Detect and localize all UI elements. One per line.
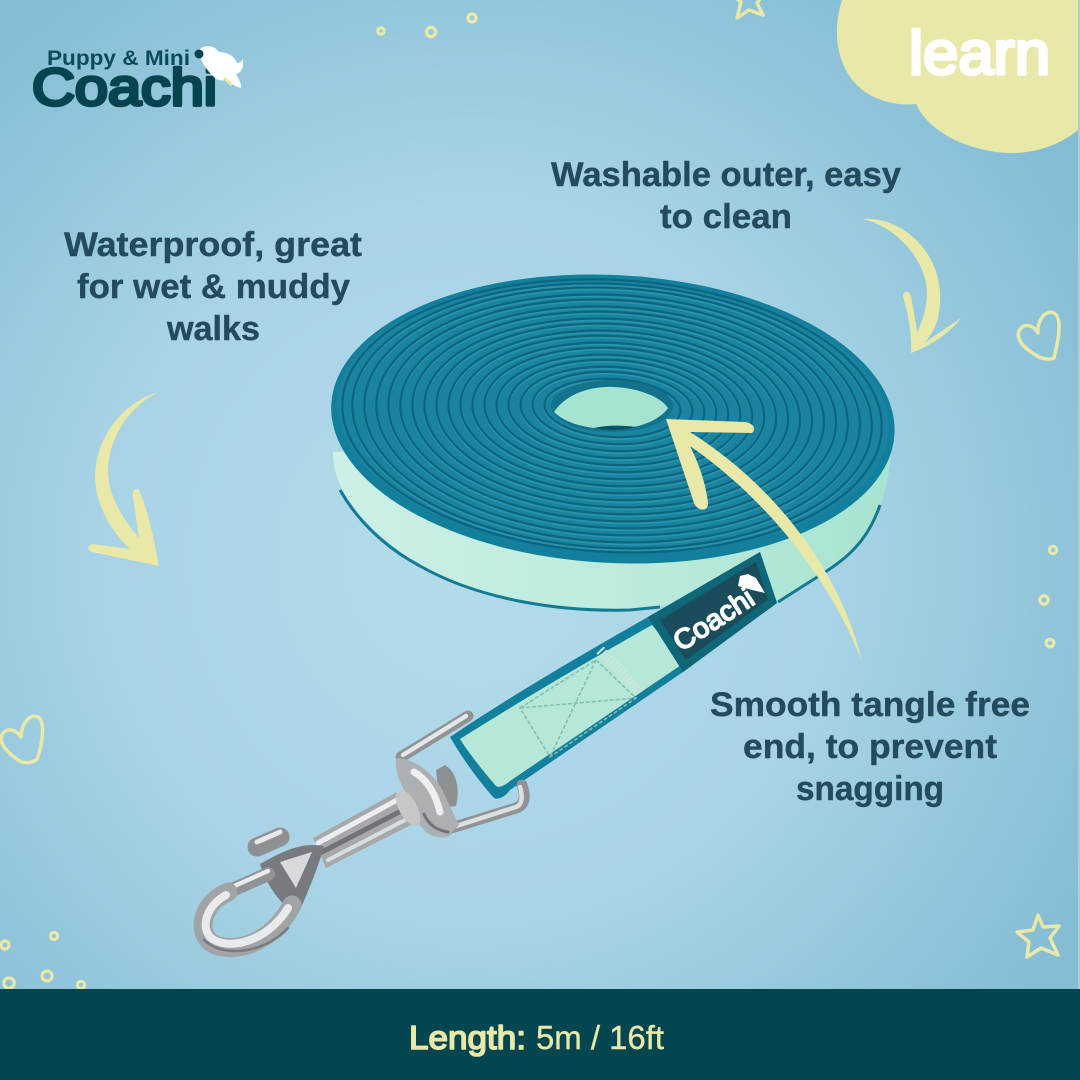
hook body	[260, 845, 324, 914]
swivel	[396, 758, 459, 837]
decoration: left heart	[1, 716, 43, 763]
heading: washable: Washable outer, easy	[551, 156, 901, 194]
heading: tangle free: Smooth tangle free	[710, 686, 1030, 724]
logo tagline: Puppy & Mini	[47, 47, 190, 70]
brand tag dog	[738, 574, 765, 593]
heading: waterproof: Waterproof, great	[64, 226, 362, 264]
brand tag	[648, 552, 777, 672]
decoration: top dots	[378, 14, 476, 37]
stitched patch	[520, 650, 640, 757]
cloud badge	[837, 0, 1078, 153]
heading: waterproof: for wet & muddy	[77, 268, 350, 306]
decoration: bottom-right star	[1017, 915, 1059, 957]
badge label: learn: learn	[909, 19, 1050, 87]
icon: jumping dog	[194, 46, 243, 88]
length label: Length:	[409, 1019, 526, 1056]
decoration: right dots	[1040, 546, 1057, 647]
hook ring	[203, 892, 292, 951]
hook pin	[232, 871, 268, 890]
product: metal clasp	[203, 716, 524, 951]
length value: 5m / 16ft	[536, 1019, 664, 1056]
logo	[32, 46, 243, 117]
heading: washable: to clean	[660, 198, 792, 236]
thumb knob	[257, 832, 280, 847]
coil centre hole	[551, 380, 673, 432]
decoration: right heart	[1018, 312, 1059, 359]
footer bar	[0, 989, 1080, 1080]
heading: tangle free	[710, 686, 1030, 808]
decoration: bottom-left dots	[1, 932, 85, 989]
coil side band	[333, 440, 892, 611]
arrow: to coil centre	[666, 419, 862, 662]
arrow: waterproof	[88, 392, 159, 566]
product: coiled lead	[324, 260, 902, 611]
D-ring	[401, 716, 524, 830]
barrel	[313, 786, 425, 868]
heading: tangle free: snagging	[796, 770, 944, 808]
heading: waterproof: walks	[166, 310, 260, 348]
product: strap	[450, 552, 777, 799]
logo wordmark: Coachi	[32, 59, 217, 117]
heading: washable	[551, 156, 901, 236]
heading: tangle free: end, to prevent	[743, 728, 997, 766]
heading: waterproof	[64, 226, 362, 348]
coil top	[324, 260, 902, 578]
brand tag text: Coachi	[667, 582, 760, 657]
arrow: washable	[863, 219, 961, 353]
decoration: top star	[731, 0, 764, 18]
